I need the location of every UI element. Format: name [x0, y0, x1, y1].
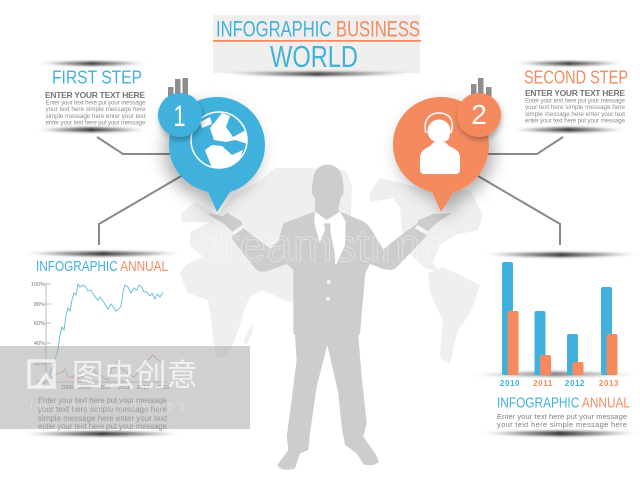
orange data line	[48, 355, 163, 380]
year labels: 2012	[565, 379, 585, 388]
icon: headset person	[420, 113, 460, 174]
shirt and tie	[314, 212, 346, 265]
subheading: ENTER YOUR TEXT HERE	[45, 90, 145, 100]
body text: simple message here enter your text	[525, 111, 625, 118]
bar icon above badge two	[471, 78, 492, 109]
title line two: WORLD	[270, 39, 358, 74]
y axis labels: 40%	[34, 341, 45, 347]
y axis labels: 80%	[34, 302, 45, 308]
body text: Enter your text here put your message	[38, 396, 167, 405]
y axis labels: 60%	[34, 321, 45, 327]
body text	[46, 100, 146, 126]
body text: Enter your text here put your message	[497, 412, 627, 421]
blue data line	[48, 284, 163, 379]
body text	[525, 98, 625, 124]
watermark: image banner	[0, 346, 250, 429]
watermark id: ID: 1000000083	[30, 401, 185, 413]
badge: number one	[158, 93, 202, 137]
icon: globe	[191, 112, 248, 170]
watermark: dreamstime: dreamstime	[197, 219, 447, 271]
panel: annual line chart	[21, 252, 184, 436]
y axis labels: 0%	[37, 380, 45, 386]
y axis labels	[31, 282, 45, 386]
title line one: INFOGRAPHIC BUSINESS	[216, 16, 420, 42]
y axis labels: 100%	[31, 282, 45, 288]
title banner	[213, 15, 421, 76]
x axis labels: 2012	[137, 385, 149, 391]
x axis labels: 2011	[118, 385, 130, 391]
2013 bars	[601, 287, 618, 375]
panel: annual bar chart	[470, 252, 640, 436]
year labels: 2010	[500, 379, 520, 388]
connector lines	[97, 137, 563, 245]
x axis labels	[61, 385, 169, 391]
pin: second step support	[393, 97, 489, 212]
watermark text: 图虫创意	[72, 358, 198, 393]
pin: first step globe	[169, 97, 265, 212]
heading: infographic annual: INFOGRAPHIC ANNUAL	[497, 396, 630, 412]
body text: simple message here enter your text	[38, 414, 168, 423]
body text: enter your text here put your message	[38, 422, 167, 431]
2010 bars	[502, 262, 518, 375]
body text: your text here simple message here	[497, 420, 627, 429]
year labels: 2013	[599, 379, 619, 388]
chart axes	[46, 283, 167, 382]
x axis labels: 2008	[61, 385, 73, 391]
world map background	[180, 168, 483, 364]
year labels	[500, 379, 619, 388]
badge: number two	[457, 93, 501, 137]
panel: first step	[35, 62, 148, 132]
watermark logo	[29, 361, 54, 387]
suit buttons	[326, 280, 331, 301]
body text: enter your text here put your message	[46, 120, 146, 126]
man silhouette	[207, 165, 452, 470]
heading: infographic annual: INFOGRAPHIC ANNUAL	[36, 259, 168, 275]
y axis labels: 20%	[34, 361, 45, 367]
2012 bars	[567, 334, 584, 375]
heading: first step: FIRST STEP	[52, 68, 142, 88]
bar icon above badge one	[168, 78, 188, 112]
body text: Enter your text here put your message	[46, 100, 146, 106]
x axis labels: 2009	[79, 385, 91, 391]
year labels: 2011	[533, 379, 553, 388]
badge: number two: 2	[471, 99, 487, 130]
body text: simple message here enter your text	[46, 113, 146, 120]
body text: enter your text here put your message	[525, 118, 625, 124]
body text: Enter your text here put your message	[525, 98, 625, 104]
badge: number one: 1	[174, 100, 186, 133]
body text: your text here simple message here	[525, 104, 625, 111]
subheading: ENTER YOUR TEXT HERE	[525, 88, 625, 98]
shirt cuffs	[232, 225, 428, 236]
panel: second step	[511, 62, 628, 132]
body text: your text here simple message here	[46, 106, 146, 113]
body text	[497, 412, 627, 429]
x axis labels: 2010	[98, 385, 110, 391]
2011 bars	[534, 311, 551, 375]
body text	[38, 396, 168, 431]
chart baseline shadow	[470, 372, 640, 376]
x axis labels: 2013	[157, 385, 169, 391]
title banner shadow	[218, 72, 416, 76]
body text: your text here simple message here	[38, 405, 167, 414]
